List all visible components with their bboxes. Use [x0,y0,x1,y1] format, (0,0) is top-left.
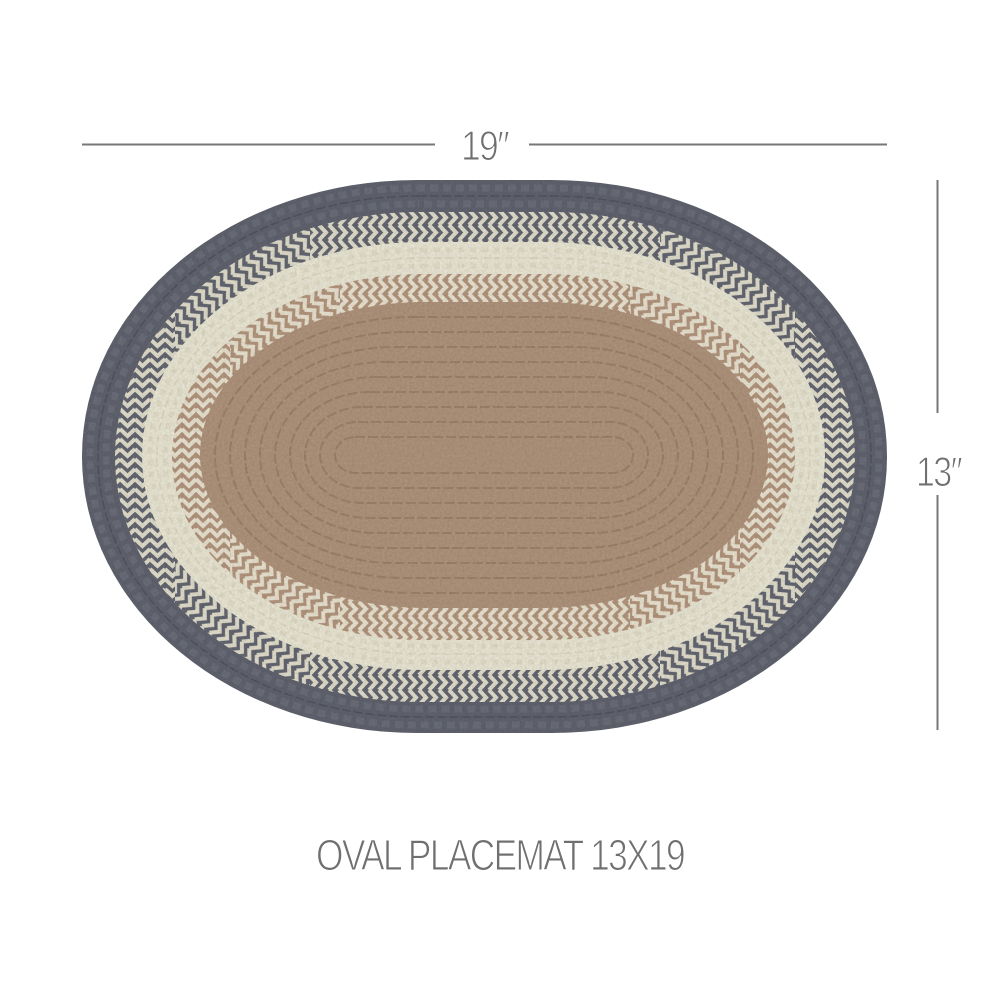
band: tan and cream herringbone [172,274,795,640]
band: slate and cream herringbone [115,212,855,702]
oval braided placemat [82,180,887,733]
caption: OVAL PLACEMAT 13X19 [316,831,684,880]
woven fibre texture [82,180,887,733]
band: cream braid [142,242,825,670]
band: outer slate braid [82,180,887,733]
center: tan coiled braid [200,302,768,608]
dimension: width 19 inches: 19″ [461,122,510,169]
dimension: height 13 inches: 13″ [916,448,963,495]
